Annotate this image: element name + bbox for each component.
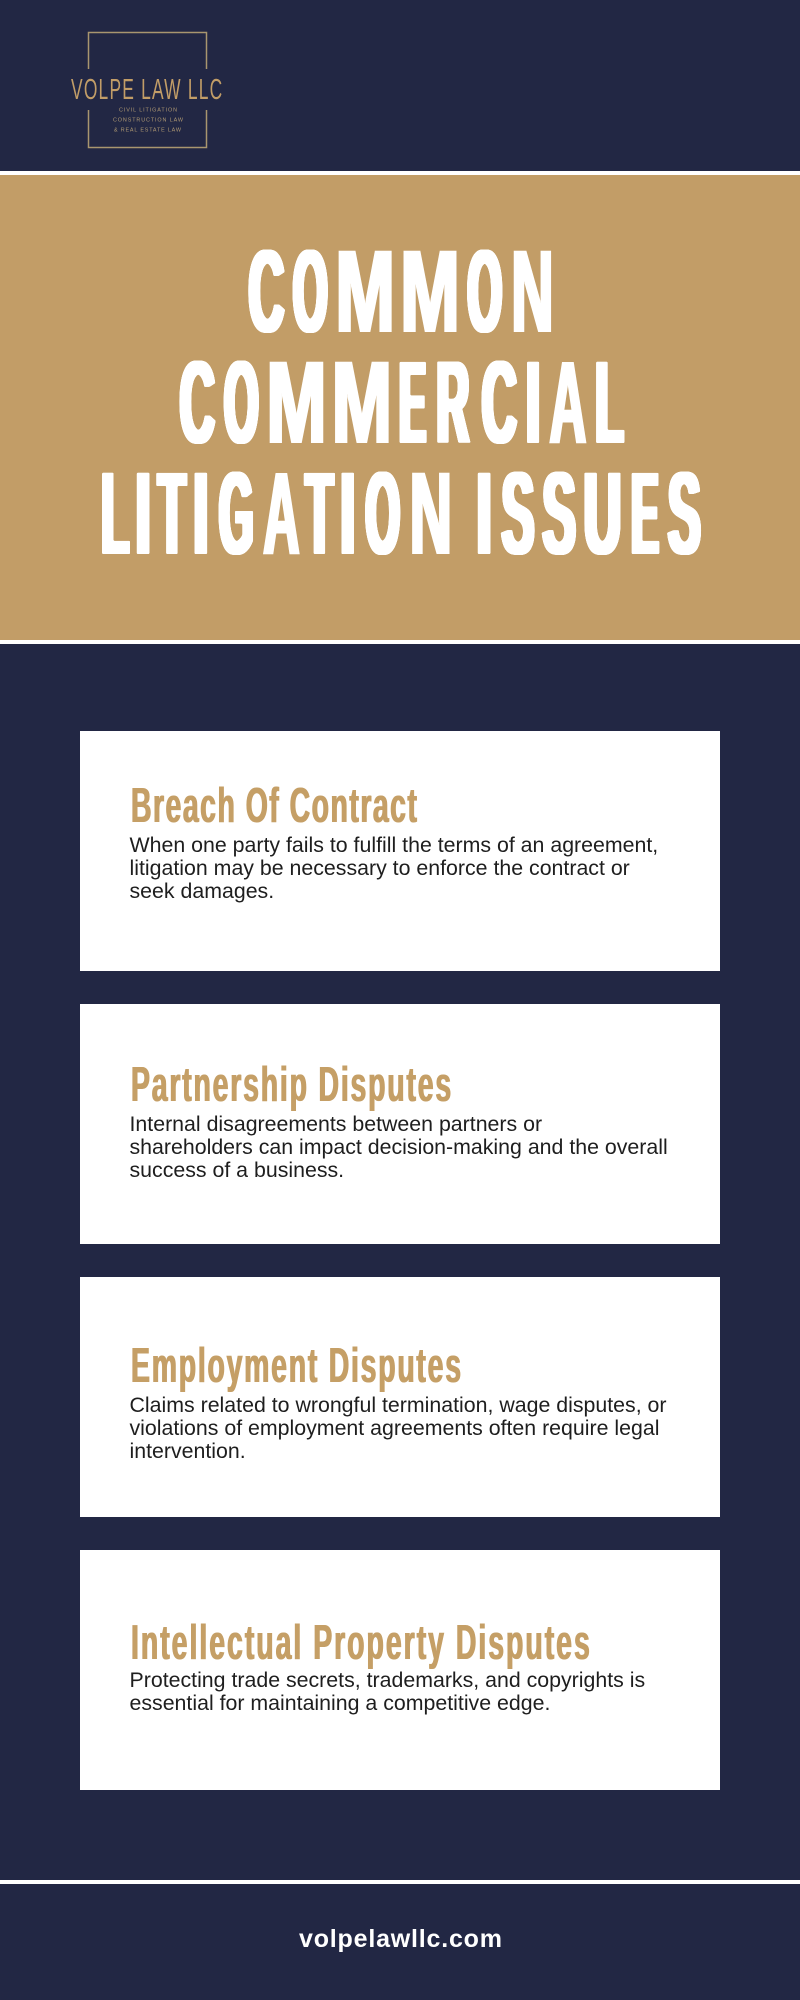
title: I bbox=[136, 448, 150, 580]
body text: shareholders can impact decision-making and the overall bbox=[130, 1135, 668, 1159]
panel: intellectual property disputes bbox=[80, 1550, 720, 1790]
title: S bbox=[543, 448, 576, 580]
title bbox=[102, 226, 701, 580]
title: S bbox=[502, 448, 534, 580]
website url: volpelawllc.com bbox=[299, 1925, 502, 1953]
title: M bbox=[332, 337, 392, 469]
title: O bbox=[293, 226, 327, 358]
logo tagline: CIVIL LITIGATION bbox=[119, 108, 177, 114]
title: I bbox=[340, 448, 355, 580]
body text: essential for maintaining a competitive edge. bbox=[130, 1691, 550, 1715]
title: O bbox=[224, 337, 258, 469]
title: G bbox=[219, 448, 253, 580]
title: A bbox=[550, 337, 586, 469]
title: A bbox=[263, 448, 300, 580]
logo frame bbox=[88, 32, 206, 148]
body text: Claims related to wrongful termination, wage disputes, or bbox=[130, 1393, 667, 1417]
header logo bbox=[71, 32, 222, 148]
title: N bbox=[511, 226, 554, 358]
footer bbox=[0, 1880, 800, 1953]
panel: partnership disputes bbox=[80, 1004, 720, 1244]
title: N bbox=[410, 448, 452, 580]
body text: Protecting trade secrets, trademarks, and copyrights is bbox=[130, 1668, 645, 1692]
title: T bbox=[306, 448, 333, 580]
title: I bbox=[526, 337, 540, 469]
title: M bbox=[400, 226, 460, 358]
title: C bbox=[249, 226, 284, 358]
title: U bbox=[584, 448, 621, 580]
body text bbox=[130, 1393, 667, 1463]
body text: intervention. bbox=[130, 1439, 246, 1463]
body text: seek damages. bbox=[130, 879, 274, 903]
title: R bbox=[437, 337, 469, 469]
title: C bbox=[482, 337, 517, 469]
logo tagline: & REAL ESTATE LAW bbox=[114, 128, 182, 134]
title: M bbox=[266, 337, 327, 469]
title: M bbox=[335, 226, 395, 358]
panel: breach of contract bbox=[80, 731, 720, 971]
body text bbox=[130, 1112, 668, 1182]
title: L bbox=[102, 448, 129, 580]
title: L bbox=[596, 337, 623, 469]
body text: Internal disagreements between partners or bbox=[130, 1112, 542, 1136]
heading: Intellectual Property Disputes bbox=[131, 1616, 590, 1670]
title: O bbox=[468, 226, 502, 358]
heading: Employment Disputes bbox=[131, 1339, 461, 1393]
logo tagline: CONSTRUCTION LAW bbox=[113, 118, 184, 124]
body text bbox=[130, 1668, 645, 1715]
body text: success of a business. bbox=[130, 1158, 344, 1182]
title: T bbox=[158, 448, 186, 580]
body text bbox=[130, 833, 658, 903]
title: I bbox=[194, 448, 208, 580]
title banner: S bbox=[668, 448, 700, 580]
title: E bbox=[400, 337, 426, 469]
title: I bbox=[477, 448, 491, 580]
title banner bbox=[0, 171, 800, 644]
body text: violations of employment agreements often require legal bbox=[130, 1416, 659, 1440]
title: E bbox=[632, 448, 658, 580]
title: O bbox=[366, 448, 400, 580]
logo wordmark: VOLPE LAW LLC bbox=[71, 74, 222, 106]
logo tagline bbox=[113, 108, 184, 134]
heading: Partnership Disputes bbox=[131, 1058, 451, 1112]
heading: Breach Of Contract bbox=[131, 779, 417, 833]
body text: When one party fails to fulfill the terms of an agreement, bbox=[130, 833, 658, 857]
panel: employment disputes bbox=[80, 1277, 720, 1517]
title: C bbox=[180, 337, 215, 469]
body text: litigation may be necessary to enforce the contract or bbox=[130, 856, 630, 880]
